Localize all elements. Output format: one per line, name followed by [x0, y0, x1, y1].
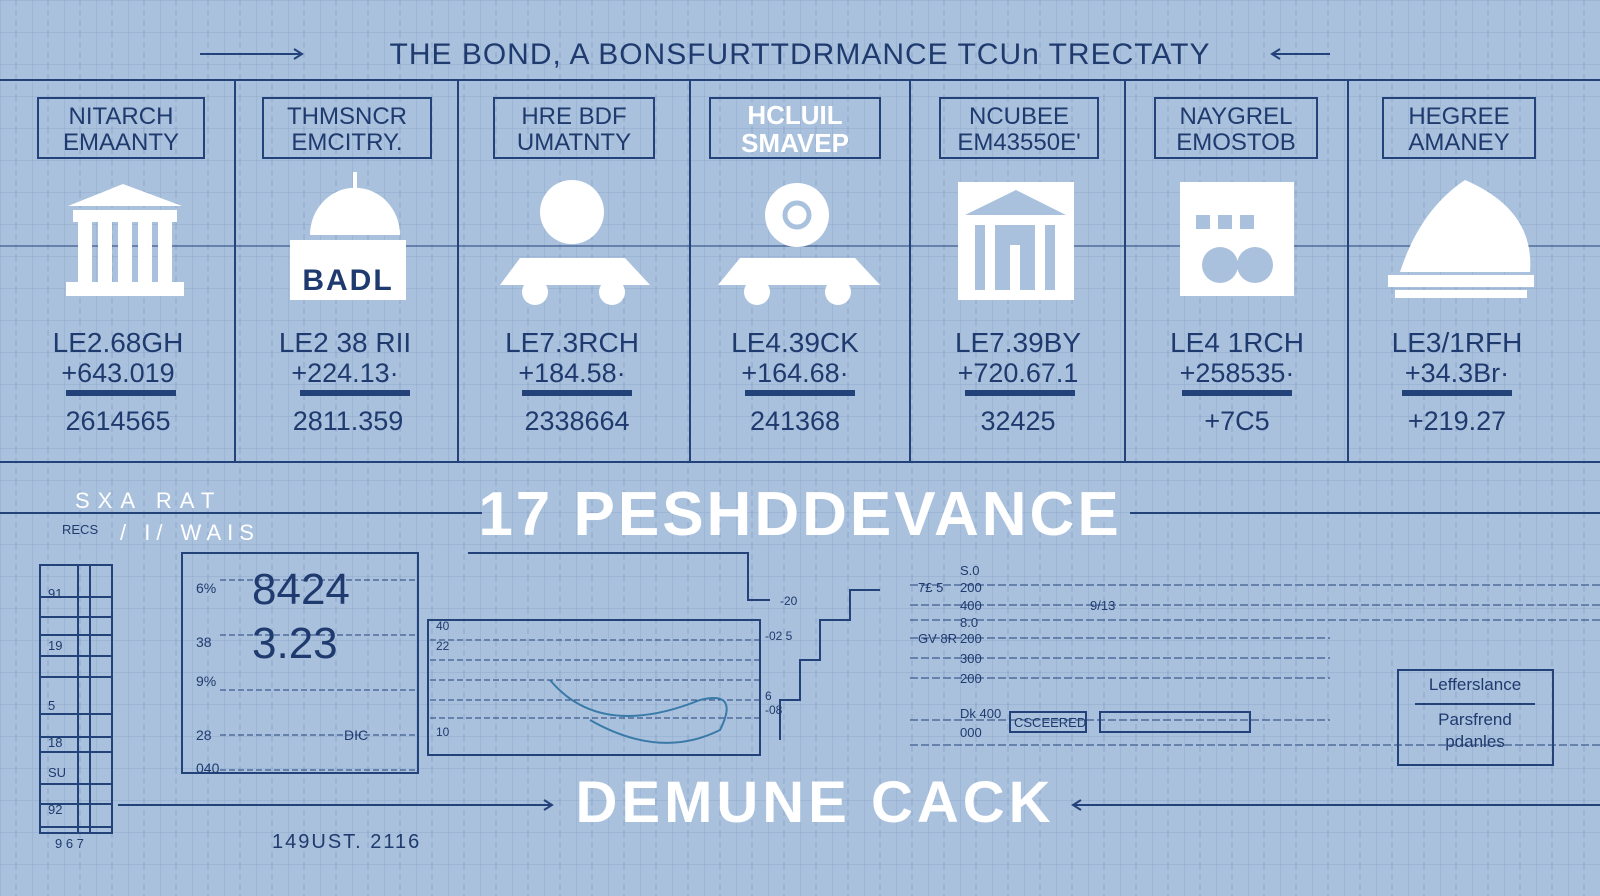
chart: right scale table [910, 563, 1600, 745]
chart: right scale table: GV 8R [918, 631, 957, 646]
panel: column 3: UMATNTY [517, 129, 631, 156]
chart: left bar grid: 5 [48, 698, 55, 713]
panel: column 3: 2338664 [524, 406, 630, 436]
panel: column 6: +258535· [1180, 358, 1294, 388]
heading: bottom: DEMUNE CAСK [576, 770, 1054, 835]
chart: right scale table: 9/13 [1090, 598, 1115, 613]
panel: column 7: LE3/1RFH [1392, 327, 1522, 358]
chart: middle line chart: 10 [436, 725, 450, 739]
chart: right scale table: 200 [960, 671, 982, 686]
chart: middle line chart: -02 5 [765, 629, 793, 643]
panel: column 4: LE4.39CK [731, 327, 859, 358]
chart: right scale table: 300 [960, 651, 982, 666]
panel: column 7: +34.3Br· [1405, 358, 1509, 388]
panel: column 6: +7C5 [1204, 406, 1270, 436]
panel: column 1: EMAANTY [63, 129, 179, 156]
callout: legend box [1398, 670, 1553, 765]
chart: left bar grid: 18 [48, 735, 62, 750]
icon: calculator [1180, 182, 1294, 296]
panel: column 1 [38, 98, 204, 436]
icon: bank [66, 184, 184, 296]
panel: column 3: HRE BDF [521, 103, 627, 130]
panel: column 5: NCUBEE [969, 103, 1069, 130]
panel: column 3 [494, 98, 654, 436]
text block: left label [62, 488, 260, 545]
chart: value panel: 8424 [252, 565, 350, 614]
chart: middle line chart: 6 [765, 689, 772, 703]
text block: left label: RECS [62, 522, 98, 537]
chart: middle line chart: -20 [780, 594, 798, 608]
panel: column 3: LE7.3RCH [505, 327, 639, 358]
panel: column 2: LE2 38 RII [279, 327, 411, 358]
chart: value panel: 3.23 [252, 619, 338, 668]
chart: value panel [182, 553, 421, 853]
panel: column 6: NAYGREL [1180, 103, 1292, 130]
panel: column 5: 32425 [980, 406, 1056, 436]
panel: column 5: LE7.39BY [955, 327, 1081, 358]
chart: left bar grid: 92 [48, 802, 62, 817]
panel: column 4: SMAVEP [741, 128, 849, 158]
chart: right scale table: 200 [960, 631, 982, 646]
heading: section 2: 17 PESHDDEVANCE [478, 480, 1122, 549]
chart: left bar grid: 19 [48, 638, 62, 653]
icon: sail [1388, 180, 1534, 298]
panel: column 1: NITARCH [69, 103, 173, 130]
panel: column 4: +164.68· [741, 358, 849, 388]
chart: right scale table: 8.0 [960, 615, 978, 630]
title: THE BOND, A BONSFURTTDRMANCE TCUn TRECTATY [390, 38, 1210, 71]
panel: column 6: LE4 1RCH [1170, 327, 1304, 358]
chart: middle line chart: -08 [765, 703, 783, 717]
chart: left bar grid: 9 6 7 [55, 836, 84, 851]
chart: right scale table: 000 [960, 725, 982, 740]
panel: column 6 [1155, 98, 1317, 436]
chart: value panel: 28 [196, 727, 212, 743]
chart: right scale table: 7£ 5 [918, 580, 943, 595]
panel: column 5 [940, 98, 1098, 436]
panel: column 1: LE2.68GH [53, 327, 183, 358]
panel: column 2 [263, 98, 431, 436]
panel: column 2: THMSNCR [287, 103, 407, 130]
icon: car with globe [500, 180, 650, 305]
chart: value panel: 38 [196, 634, 212, 650]
chart: middle line chart [428, 553, 880, 755]
panel: column 5: EM43550E' [957, 129, 1081, 156]
chart: left bar grid [40, 565, 112, 851]
chart: value panel: DIC [344, 727, 368, 743]
panel: column 7: +219.27 [1408, 406, 1506, 436]
panel: column 2: EMCITRY. [291, 129, 403, 156]
panel: column 2: BADL [302, 264, 394, 297]
panel: column 4: 241368 [750, 406, 840, 436]
callout: legend box: pdanles [1445, 732, 1505, 751]
panel: column 7 [1383, 98, 1535, 436]
chart: right scale table: 400 [960, 598, 982, 613]
icon: car with wheel [718, 183, 880, 305]
panel: column 1: 2614565 [65, 406, 171, 436]
chart: left bar grid: SU [48, 765, 66, 780]
chart: value panel: 149UST. 2116 [272, 831, 421, 853]
chart: right scale table: S.0 [960, 563, 980, 578]
panel: column 7: HEGREE [1408, 103, 1510, 130]
chart: value panel: 040 [196, 760, 220, 776]
chart: right scale table: CSCEERED [1014, 715, 1086, 730]
panel: column 6: EMOSTOB [1176, 129, 1296, 156]
panel: column 3: +184.58· [518, 358, 626, 388]
heading: bottom [118, 770, 1600, 835]
callout: legend box: Lefferslance [1429, 675, 1521, 694]
chart: right scale table: 200 [960, 580, 982, 595]
text block: left label: SXA RAT [75, 488, 222, 513]
icon: building [958, 182, 1074, 300]
panel: column 2: +224.13· [291, 358, 399, 388]
callout: legend box: Parsfrend [1438, 710, 1512, 729]
panel: column 5: +720.67.1 [958, 358, 1078, 388]
panel: column 2: 2811.359 [293, 406, 403, 436]
panel: column 1: +643.019 [61, 358, 175, 388]
chart: middle line chart: 40 [436, 619, 450, 633]
chart: right scale table: Dk 400 [960, 706, 1001, 721]
text block: left label: / I/ WAIS [120, 520, 260, 545]
panel: column 4 [710, 98, 880, 436]
panel: column 4: HCLUIL [747, 100, 843, 130]
icon: dome [290, 172, 406, 300]
chart: value panel: 6% [196, 580, 216, 596]
panel: column 7: AMANEY [1408, 129, 1510, 156]
chart: value panel: 9% [196, 673, 216, 689]
chart: middle line chart: 22 [436, 639, 450, 653]
chart: left bar grid: 91 [48, 586, 62, 601]
